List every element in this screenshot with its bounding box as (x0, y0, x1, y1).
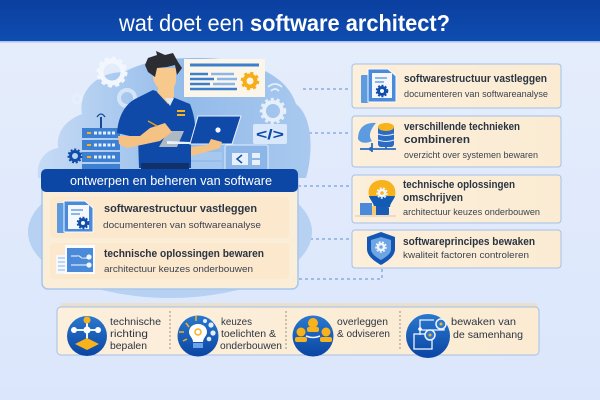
card: verschillende technieken combineren: overzicht over systemen bewaren (404, 150, 538, 161)
panel: ontwerpen en beheren van software (41, 169, 298, 289)
item: bewaken van de samenhang: bewaken van (451, 316, 516, 328)
card: technische oplossingen omschrijven: technische oplossingen (403, 179, 515, 191)
pen (148, 121, 157, 126)
panel heading: ontwerpen en beheren van software (70, 174, 272, 188)
card: softwareprincipes bewaken: kwaliteit factoren controleren (403, 250, 529, 261)
row: technische oplossingen bewaren (50, 243, 289, 279)
item: keuzes toelichten en onderbouwen: toelichten & (221, 328, 276, 340)
torso (117, 90, 195, 168)
neck (157, 85, 174, 104)
panel heading (41, 169, 298, 192)
card: softwarestructuur vastleggen (352, 64, 561, 108)
trousers (141, 163, 189, 171)
right arm (191, 139, 222, 156)
server rack (82, 114, 120, 172)
laptop (167, 116, 241, 144)
bottom bar (57, 303, 539, 358)
item: overleggen en adviseren: overleggen (337, 316, 388, 328)
title: wat doet een software architect? (118, 10, 450, 36)
card: verschillende technieken combineren (352, 116, 561, 167)
card: verschillende technieken combineren: verschillende technieken (404, 121, 520, 133)
icon: cloud and database (358, 123, 396, 152)
card: softwarestructuur vastleggen: softwarestructuur vastleggen (404, 73, 547, 85)
icon: light bulb gear (355, 180, 396, 216)
hair (145, 51, 182, 77)
icon: linked flow (406, 314, 450, 358)
icon: shield gear (367, 232, 395, 265)
item: technische richting bepalen (67, 316, 161, 356)
icon: people (292, 316, 334, 356)
row: technische oplossingen bewaren: architectuur keuzes onderbouwen (104, 264, 253, 275)
card: softwareprincipes bewaken: softwareprincipes bewaken (403, 236, 535, 248)
icon: direction (67, 316, 107, 356)
item: technische richting bepalen: bepalen (110, 340, 147, 352)
row: softwarestructuur vastleggen (50, 197, 289, 238)
connector lines (298, 89, 382, 279)
icon: blueprint (56, 245, 95, 274)
illustration: technology cloud (28, 58, 312, 298)
small gear (68, 150, 82, 162)
person: software architect (117, 51, 241, 171)
code tag: </> (256, 126, 284, 142)
notepad (159, 131, 184, 147)
icon: light bulb (178, 316, 218, 356)
row: softwarestructuur vastleggen: softwarestructuur vastleggen (104, 203, 257, 215)
wifi signal (268, 84, 282, 91)
icon: document gear (361, 69, 396, 103)
item: keuzes toelichten en onderbouwen (178, 316, 282, 356)
item: overleggen en adviseren: & odviseren (337, 328, 390, 340)
item: technische richting bepalen: richting (110, 328, 148, 340)
header band (0, 0, 600, 42)
face (153, 68, 176, 91)
screen panel (190, 145, 268, 171)
card: softwareprincipes bewaken (352, 230, 561, 268)
item: technische richting bepalen: technische (110, 316, 161, 328)
card: softwarestructuur vastleggen: documenteren van softwareanalyse (404, 89, 548, 100)
item: keuzes toelichten en onderbouwen: onderbouwen (220, 340, 282, 352)
code tag (253, 124, 287, 144)
item: bewaken van de samenhang: de samenhang (453, 329, 523, 341)
shirt badge (177, 111, 185, 115)
item: keuzes toelichten en onderbouwen: keuzes (221, 316, 252, 328)
card: technische oplossingen omschrijven (352, 175, 561, 223)
row: softwarestructuur vastleggen: documenteren van softwareanalyse (103, 220, 261, 231)
row: technische oplossingen bewaren: technische oplossingen bewaren (104, 248, 264, 260)
item: overleggen en adviseren (292, 316, 390, 356)
dashboard board (184, 59, 265, 97)
gears (73, 58, 285, 123)
forearm (118, 123, 172, 148)
card: technische oplossingen omschrijven: architectuur keuzes onderbouwen (403, 207, 540, 218)
icon: document gear (57, 201, 93, 233)
card: verschillende technieken combineren: combineren (404, 134, 470, 146)
item: bewaken van de samenhang (406, 314, 523, 358)
gear icon (242, 73, 258, 89)
card: technische oplossingen omschrijven: omschrijven (403, 192, 463, 204)
